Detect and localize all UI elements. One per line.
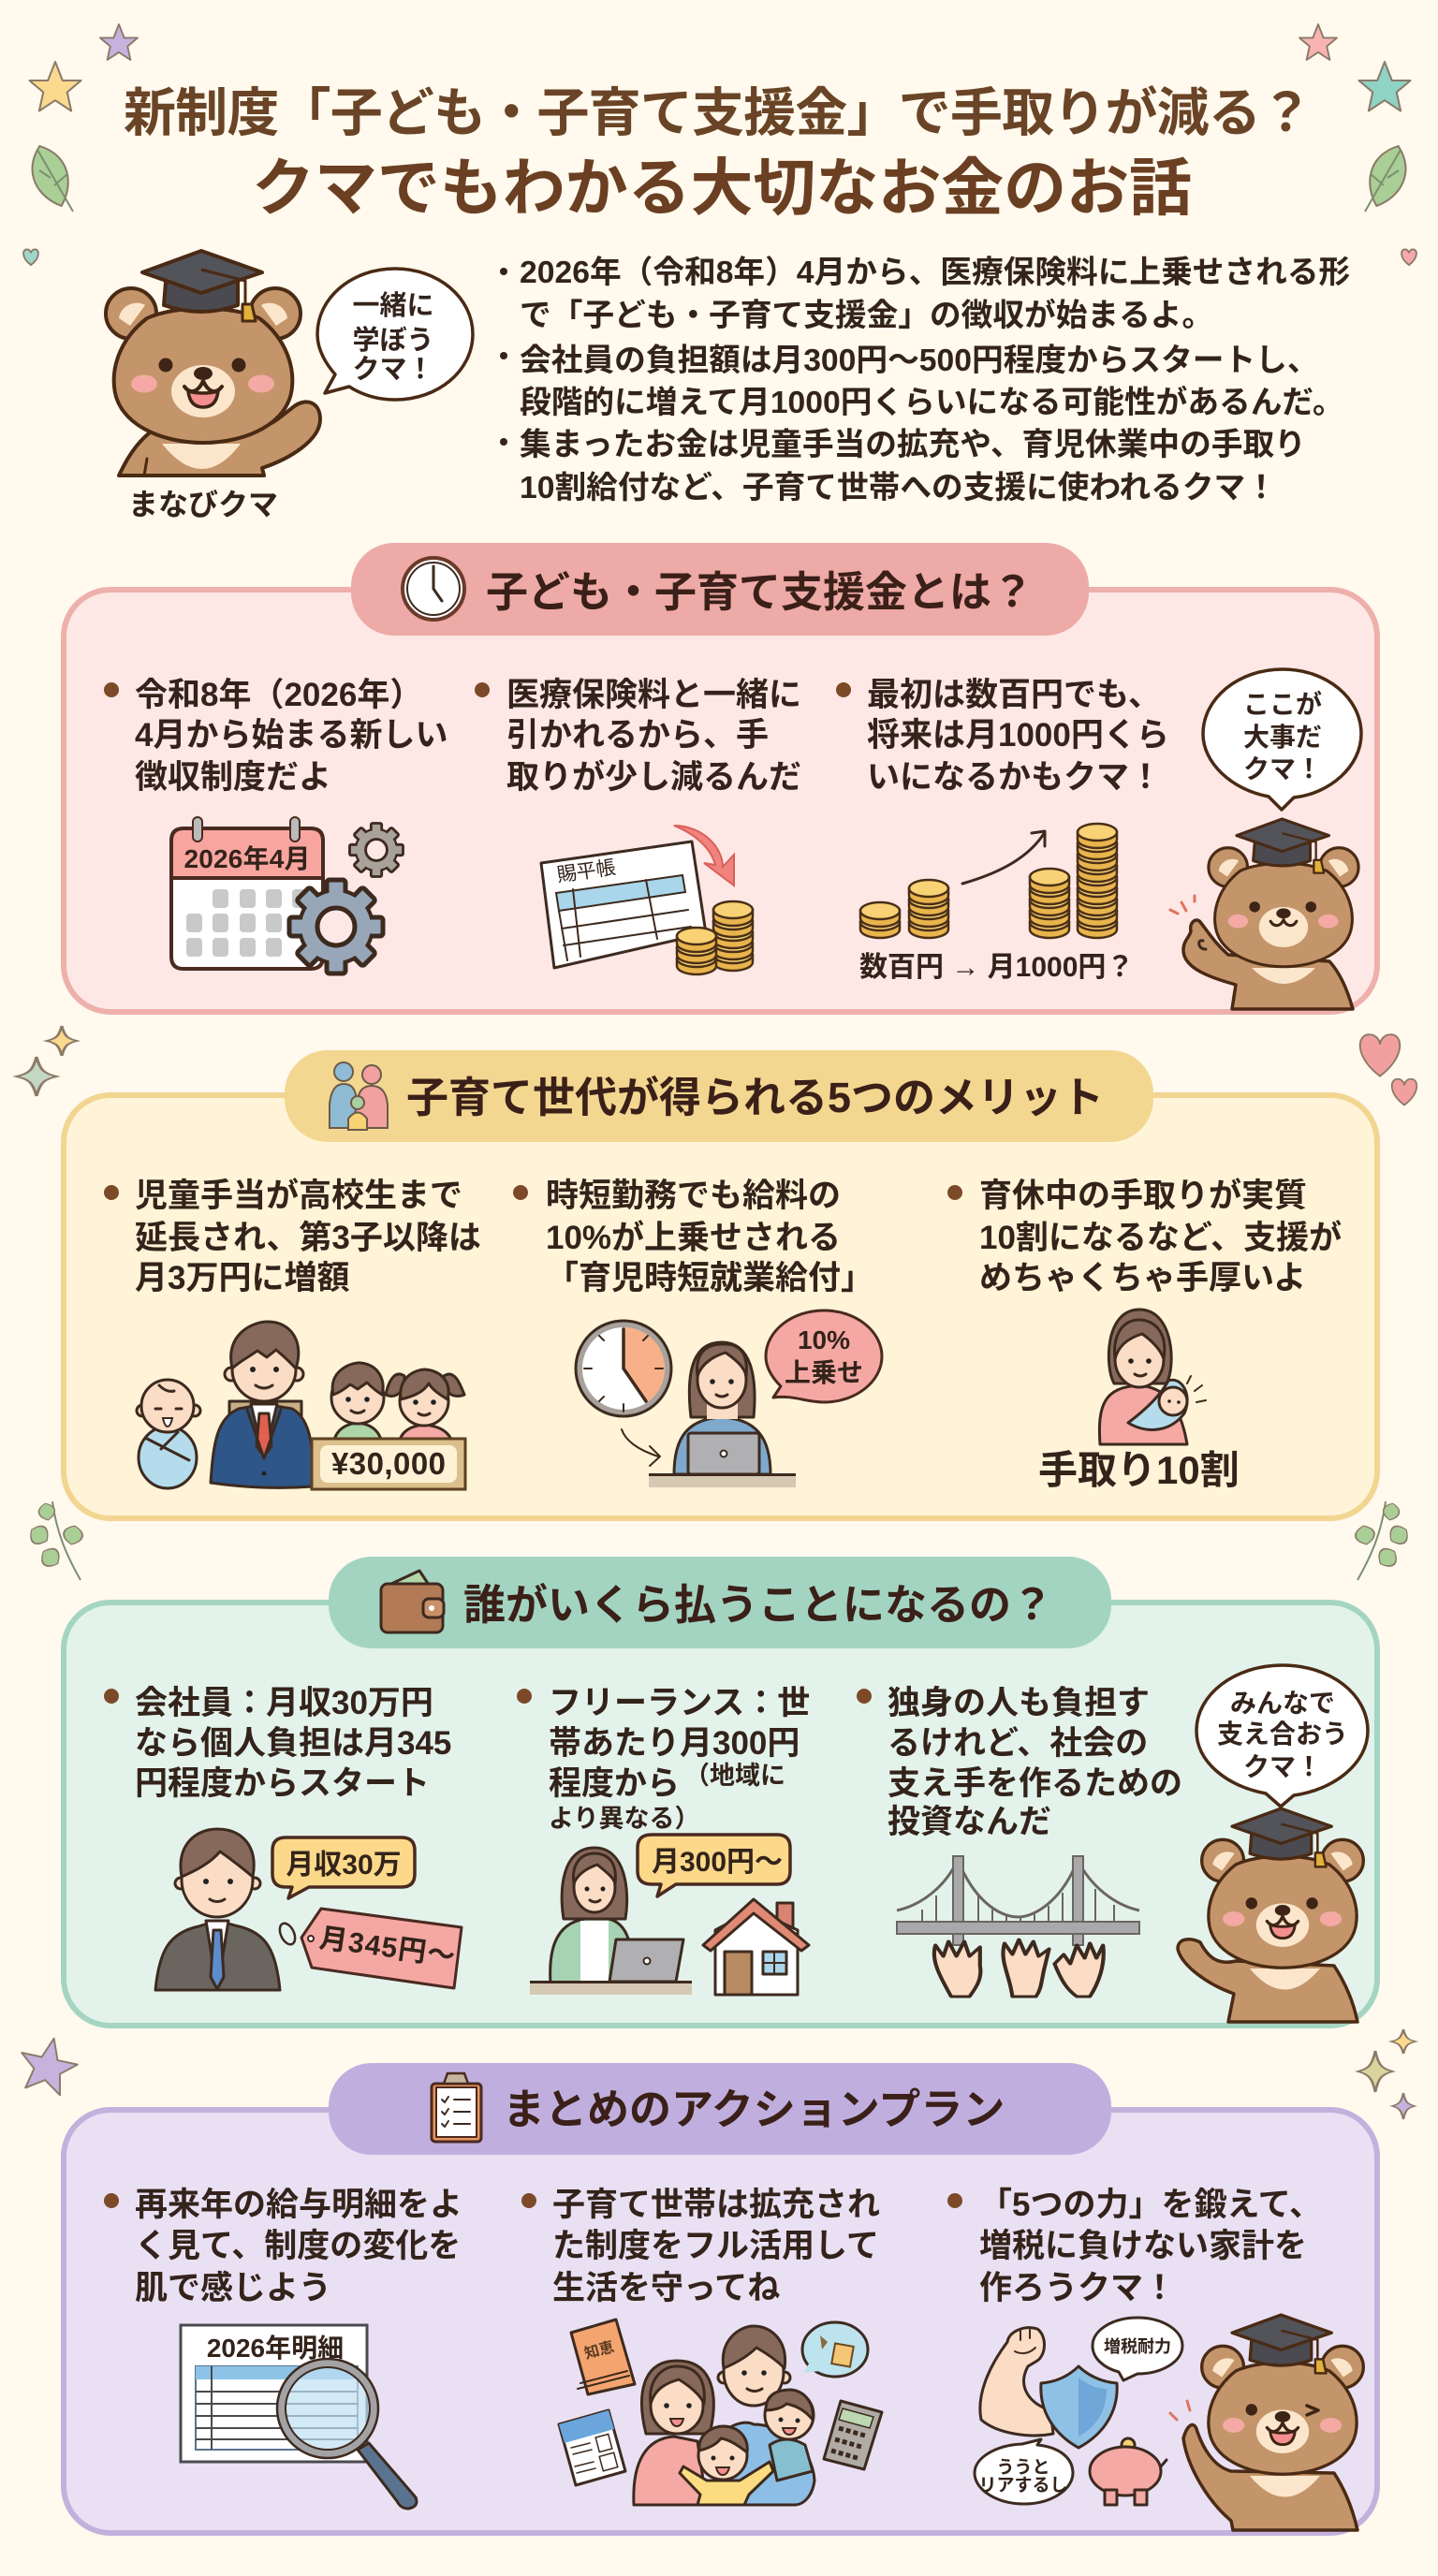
- text: column 1: く見て、制度の変化を: [135, 2228, 461, 2264]
- illustration: pay slip and magnifier: [181, 2325, 417, 2509]
- text: column 2: 医療保険料と一緒に: [506, 677, 801, 713]
- text: column 3: 将来は月1000円くら: [867, 717, 1169, 754]
- text: column 2: [521, 2187, 880, 2306]
- piggy bank: [1090, 2438, 1167, 2505]
- bubble: ううと: [996, 2458, 1050, 2478]
- illustration: pay slip and magnifier: 2026年明細: [207, 2334, 344, 2363]
- sign: ¥30,000: [331, 1446, 446, 1481]
- speech bubble: 一緒に学ぼうクマ: [317, 269, 473, 400]
- text: column 2: [513, 1178, 873, 1296]
- speech bubble: 一緒に学ぼうクマ: 学ぼう: [352, 325, 434, 356]
- speech bubble: ここが大事だクマ: [1203, 669, 1361, 810]
- text: column 2: [475, 677, 801, 796]
- book: 知恵: [582, 2337, 616, 2363]
- text: column 1: 徴収制度だよ: [135, 759, 331, 796]
- mascot: winking bear: [1170, 2315, 1363, 2530]
- mother: [634, 2361, 713, 2505]
- text: column 2: 「育児時短就業給付」: [546, 1260, 873, 1296]
- sign: [312, 1439, 465, 1489]
- mascot: waving bear: [1178, 1808, 1363, 2022]
- decoration: stars and leaves: [15, 24, 1416, 2119]
- speech bubble: みんなで支え合おうクマ: 支え合おう: [1217, 1720, 1348, 1749]
- text: column 2: （地域に: [684, 1762, 785, 1790]
- text: column 3: 「5つの力」を鍛えて、: [979, 2187, 1322, 2223]
- text: column 2: 生活を守ってね: [552, 2270, 780, 2306]
- text: column 2: 10%が上乗せされる: [546, 1220, 841, 1256]
- illustration: children growing up with ¥30,000 sign: [137, 1322, 465, 1489]
- illustration: strength, shield, piggy bank, bubbles: [975, 2318, 1182, 2505]
- text: column 3: 独身の人も負担す: [888, 1685, 1150, 1721]
- toddler: [765, 2390, 814, 2481]
- icon: calendar and gears: 2026年4月: [183, 844, 311, 873]
- illustration: clock and working woman: [576, 1310, 882, 1487]
- panel: 子ども・子育て支援金とは: [64, 543, 1377, 1012]
- text: column 2: た制度をフル活用して: [552, 2228, 879, 2264]
- heading pill: [329, 2063, 1111, 2155]
- bubble: リアするし: [978, 2475, 1068, 2496]
- speech bubble: みんなで支え合おうクマ: みんなで: [1230, 1689, 1335, 1718]
- speech bubble: みんなで支え合おうクマ: クマ！: [1243, 1752, 1322, 1781]
- speech bubble: ここが大事だクマ: ここが: [1243, 689, 1322, 719]
- heading pill: 子ども・子育て支援金とは？: [486, 568, 1034, 616]
- text: column 2: 時短勤務でも給料の: [546, 1178, 841, 1214]
- text: column 1: 延長され、第3子以降は: [135, 1220, 481, 1256]
- text: column 1: 円程度からスタート: [135, 1765, 430, 1802]
- intro text: 10割給付など、子育て世帯への支援に使われるクマ！: [520, 470, 1277, 505]
- text: column 3: 作ろうクマ！: [979, 2270, 1176, 2306]
- text: column 3: るけれど、社会の: [888, 1725, 1148, 1762]
- baby: [137, 1380, 200, 1488]
- intro text: [500, 255, 1350, 505]
- text: column 3: 最初は数百円でも、: [867, 677, 1161, 713]
- illustration: mother holding baby: [1038, 1310, 1240, 1492]
- text: column 1: [104, 1685, 451, 1802]
- text: column 3: [947, 2187, 1322, 2306]
- heading pill: [329, 1557, 1111, 1648]
- bubble: [975, 2439, 1073, 2504]
- title: [124, 83, 1313, 224]
- illustration: mother holding baby: 手取り10割: [1038, 1448, 1240, 1492]
- heading pill: 子育て世代が得られる5つのメリット: [406, 1074, 1104, 1121]
- text: column 3: [857, 1685, 1182, 1840]
- heading pill: 誰がいくら払うことになるの？: [463, 1581, 1053, 1629]
- text: column 1: [104, 677, 448, 796]
- text: column 1: [104, 2187, 462, 2306]
- text: column 3: 増税に負けない家計を: [979, 2228, 1307, 2264]
- text: column 1: なら個人負担は月345: [135, 1725, 451, 1762]
- text: column 3: [836, 677, 1169, 796]
- text: column 1: 令和8年（2026年）: [135, 677, 422, 713]
- text: column 3: めちゃくちゃ手厚いよ: [979, 1260, 1306, 1296]
- illustration: bridge supported by hands: [897, 1856, 1139, 1997]
- text: column 2: 程度から: [549, 1765, 680, 1802]
- title: 新制度「子ども・子育て支援金」で手取りが減る？: [124, 83, 1313, 142]
- speech bubble: ここが大事だクマ: クマ！: [1243, 754, 1322, 783]
- mascot: まなびクマ: [106, 251, 320, 521]
- text: column 3: 投資なんだ: [888, 1804, 1051, 1840]
- student in suit: [211, 1322, 314, 1487]
- illustration: clock and working woman: 10%: [798, 1325, 850, 1354]
- bubble: 増税耐力: 増税耐力: [1104, 2337, 1171, 2356]
- illustration: freelancer and house: 月300円～: [652, 1847, 783, 1878]
- panel: まとめのアクションプラン: [64, 2063, 1377, 2533]
- chart: coin stacks growing: 数百円 → 月1000円？: [859, 952, 1134, 983]
- text: column 2: 帯あたり月300円: [549, 1725, 800, 1762]
- speech bubble: みんなで支え合おうクマ: [1196, 1665, 1368, 1807]
- title: クマでもわかる大切なお金のお話: [252, 154, 1192, 224]
- heading pill: [351, 543, 1089, 636]
- text: column 3: [947, 1178, 1342, 1296]
- illustration: office worker with tags: 月345円～: [317, 1923, 457, 1972]
- kids: [331, 1363, 464, 1440]
- flexed arm: [980, 2328, 1053, 2436]
- text: column 3: 10割になるなど、支援が: [979, 1220, 1342, 1256]
- intro text: 段階的に増えて月1000円くらいになる可能性があるんだ。: [520, 384, 1344, 420]
- text: column 1: 月3万円に増額: [135, 1260, 349, 1296]
- intro text: 2026年（令和8年）4月から、医療保険料に上乗せされる形: [520, 255, 1350, 290]
- text: column 3: 育休中の手取りが実質: [979, 1178, 1307, 1214]
- shield: [1041, 2366, 1117, 2448]
- text: column 1: 再来年の給与明細をよ: [135, 2187, 462, 2223]
- bubble: 増税耐力: [1093, 2318, 1182, 2380]
- illustration: freelancer and house: [530, 1835, 809, 1995]
- illustration: office worker with tags: 月収30万: [286, 1850, 402, 1881]
- chart: coin stacks growing: [859, 824, 1134, 983]
- illustration: office worker with tags: [155, 1829, 462, 1990]
- heading pill: [285, 1050, 1153, 1142]
- book: [571, 2320, 635, 2394]
- text: column 2: 取りが少し減るんだ: [506, 759, 801, 796]
- text: column 2: 引かれるから、手: [506, 717, 769, 754]
- illustration: family with book, leaflet, bubble, calculator: [559, 2320, 882, 2505]
- intro text: 会社員の負担額は月300円～500円程度からスタートし、: [520, 343, 1319, 378]
- speech bubble: ここが大事だクマ: 大事だ: [1243, 723, 1322, 752]
- text: column 3: いになるかもクマ！: [867, 759, 1162, 796]
- illustration: clock and working woman: 上乗せ: [785, 1358, 863, 1387]
- intro text: で「子ども・子育て支援金」の徴収が始まるよ。: [520, 297, 1213, 333]
- mascot: pointing bear: [1170, 819, 1358, 1009]
- leaflet: [559, 2410, 625, 2485]
- panel: 子育て世代が得られる5つのメリット: [64, 1050, 1377, 1518]
- icon: calendar and gears: [171, 817, 403, 973]
- child: [680, 2426, 773, 2505]
- heading pill: まとめのアクションプラン: [503, 2086, 1005, 2133]
- text: column 1: 会社員：月収30万円: [135, 1685, 433, 1721]
- panel: 誰がいくら払うことになるの: [64, 1557, 1377, 2026]
- text: column 2: [517, 1685, 810, 1833]
- text: column 2: フリーランス：世: [549, 1685, 810, 1721]
- speech bubble: [802, 2322, 868, 2377]
- speech bubble: 一緒に学ぼうクマ: クマ！: [352, 355, 434, 385]
- intro text: 集まったお金は児童手当の拡充や、育児休業中の手取り: [520, 427, 1306, 462]
- speech bubble: 一緒に学ぼうクマ: 一緒に: [352, 290, 434, 321]
- father: [714, 2326, 814, 2505]
- icon: pay slip with coins: [541, 826, 753, 974]
- text: column 1: [104, 1178, 481, 1296]
- mascot: まなびクマ: まなびクマ: [128, 488, 278, 521]
- text: column 2: より異なる）: [549, 1805, 699, 1833]
- text: column 1: 肌で感じよう: [135, 2270, 331, 2306]
- calculator: [824, 2401, 882, 2469]
- text: column 3: 支え手を作るための: [888, 1765, 1182, 1802]
- text: column 2: 子育て世帯は拡充され: [552, 2187, 880, 2223]
- text: column 1: 児童手当が高校生まで: [135, 1178, 462, 1214]
- icon: pay slip with coins: 賜平帳: [555, 856, 617, 886]
- text: column 1: 4月から始まる新しい: [135, 717, 448, 754]
